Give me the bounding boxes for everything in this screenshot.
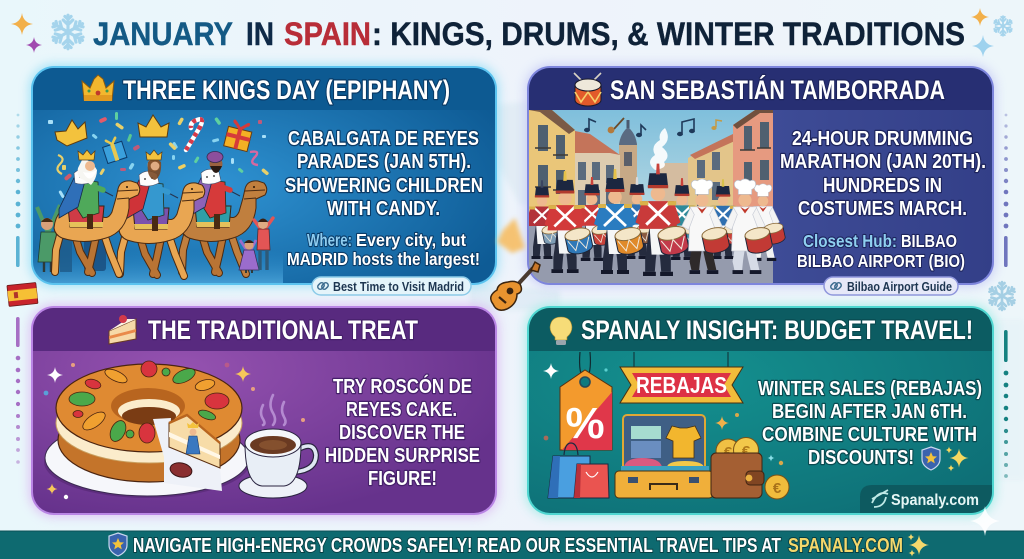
branding: spanaly.com badge: Spanaly.com xyxy=(891,492,979,509)
building left yellow xyxy=(529,110,575,212)
illustration: wallet and euro coins: € xyxy=(773,480,782,497)
footer text: SPANALY.COM xyxy=(788,535,903,557)
crown centre xyxy=(138,115,169,137)
text block: cabalgata description: CABALGATA DE REYES xyxy=(288,128,479,150)
text block: where: MADRID hosts the largest! xyxy=(287,249,480,269)
icon: shield and sparkle xyxy=(922,446,968,472)
candied fruit xyxy=(69,361,229,444)
icon: guitar xyxy=(491,262,540,310)
smoke xyxy=(650,128,668,170)
panel: three kings day xyxy=(29,64,499,295)
illustration: discount tag xyxy=(560,352,612,450)
faint world map background xyxy=(470,100,1024,480)
illustration: wallet and euro coins: € xyxy=(742,443,751,460)
camel and king three xyxy=(181,152,267,274)
illustration: hot chocolate cup xyxy=(239,395,316,498)
text block: drumming description: 24-HOUR DRUMMING xyxy=(792,128,973,150)
link pill: bilbao airport guide xyxy=(824,277,958,295)
text block: cabalgata description: PARADES (JAN 5TH). xyxy=(297,151,471,173)
footer banner xyxy=(0,531,1024,559)
title: SPAIN xyxy=(284,16,371,52)
distant building xyxy=(660,163,688,206)
icon: spain map shape xyxy=(497,218,525,253)
tower xyxy=(619,120,637,204)
building right salmon xyxy=(733,110,773,208)
text block: roscon description xyxy=(325,374,480,490)
title: : KINGS, DRUMS, & WINTER TRADITIONS xyxy=(372,16,965,52)
decorative dots right top xyxy=(1004,114,1008,267)
link pill: bilbao airport guide: Bilbao Airport Guide xyxy=(847,280,952,294)
bean xyxy=(169,461,193,479)
gift yellow xyxy=(224,120,253,152)
gift blue xyxy=(101,136,127,164)
text block: drumming description: COSTUMES MARCH. xyxy=(798,198,967,220)
text block: drumming description: HUNDREDS IN xyxy=(823,175,942,197)
branding: spanaly.com badge xyxy=(860,485,992,513)
text block: closest hub xyxy=(797,231,965,271)
street xyxy=(529,225,773,283)
icon: footer shield xyxy=(109,533,127,556)
children right xyxy=(239,218,273,273)
music notes xyxy=(584,118,722,137)
icon: light bulb xyxy=(550,317,572,345)
panel: traditional treat xyxy=(29,304,499,517)
link pill: best time to visit madrid xyxy=(312,277,471,295)
text block: winter sales description xyxy=(758,378,982,469)
text block: winter sales description: DISCOUNTS! xyxy=(808,447,914,469)
icon: right snowflake xyxy=(988,282,1016,310)
icon: drum xyxy=(574,73,601,106)
text block: roscon description: FIGURE! xyxy=(368,468,437,490)
link pill: best time to visit madrid: Best Time to Visit Madrid xyxy=(333,280,464,294)
drummers back row xyxy=(526,177,786,261)
text block: closest hub: BILBAO AIRPORT (BIO) xyxy=(797,251,965,271)
icon: gold crown xyxy=(82,75,114,101)
illustration: drummers in plaza xyxy=(526,110,786,283)
text block: cabalgata description: WITH CANDY. xyxy=(327,198,440,220)
illustration: wallet and euro coins: € xyxy=(724,444,733,461)
decorative dots right bottom xyxy=(1004,330,1008,478)
illustration: rebajas banner: REBAJAS xyxy=(636,372,727,398)
sparkles around cake xyxy=(44,363,305,499)
icon: top right snowflake xyxy=(993,16,1013,36)
confetti xyxy=(48,112,269,198)
text block: roscon description: HIDDEN SURPRISE xyxy=(325,445,480,467)
panel: spanaly insight xyxy=(525,304,996,517)
sparkles around sale items xyxy=(543,363,783,465)
illustration: wallet and euro coins xyxy=(711,438,789,499)
footer text: NAVIGATE HIGH-ENERGY CROWDS SAFELY! READ OUR ESSENTIAL TRAVEL TIPS AT xyxy=(133,535,781,557)
text block: drumming description: MARATHON (JAN 20TH). xyxy=(780,151,986,173)
illustration: three kings on camels xyxy=(37,112,273,276)
text block: where: Every city, but xyxy=(356,230,466,250)
illustration: shopping bags xyxy=(548,443,609,498)
illustration: roscon de reyes cake xyxy=(44,361,250,498)
icon: title snowflake xyxy=(51,15,85,49)
heading: tamborrada: SAN SEBASTIÁN TAMBORRADA xyxy=(610,74,945,105)
icon: corner sparkle xyxy=(970,506,1000,536)
crowd left xyxy=(37,205,106,272)
panel: san sebastian tamborrada xyxy=(525,64,996,295)
icon: spanish flag xyxy=(7,282,38,306)
text block: closest hub: BILBAO xyxy=(901,231,957,251)
decorative dots left bottom xyxy=(16,317,20,464)
text block: closest hub: Closest Hub: xyxy=(803,231,897,251)
title: JANUARY xyxy=(93,16,233,52)
candy cane xyxy=(186,119,202,150)
text block: where xyxy=(287,230,480,269)
cut wedge xyxy=(153,418,222,491)
text block: cabalgata description: SHOWERING CHILDREN xyxy=(285,175,483,197)
text block: winter sales description: COMBINE CULTURE WITH xyxy=(762,424,977,446)
title xyxy=(93,16,965,52)
text block: winter sales description: BEGIN AFTER JAN 6TH. xyxy=(772,401,967,423)
crown left xyxy=(55,120,87,146)
camel and king two xyxy=(119,150,205,276)
heading: traditional treat: THE TRADITIONAL TREAT xyxy=(148,315,418,345)
title: IN xyxy=(246,16,274,52)
text block: roscon description: REYES CAKE. xyxy=(346,399,457,421)
building right back xyxy=(688,134,733,206)
illustration: open suitcase xyxy=(615,415,713,498)
illustration: discount tag: % xyxy=(565,399,605,448)
drummers front row xyxy=(545,164,773,276)
icon: cake slice xyxy=(109,315,136,344)
icon: top sparkles xyxy=(11,8,994,57)
illustration: rebajas banner xyxy=(620,352,743,403)
decorative dots left top xyxy=(16,114,20,267)
text block: roscon description: TRY ROSCÓN DE xyxy=(333,374,472,398)
text block: cabalgata description xyxy=(285,128,483,220)
text block: winter sales description: WINTER SALES (REBAJAS) xyxy=(758,378,982,400)
cut slice face xyxy=(169,415,220,468)
text block: roscon description: DISCOVER THE xyxy=(339,422,465,444)
text block: drumming description xyxy=(780,128,986,220)
text block: where: Where: xyxy=(307,230,352,250)
building left back xyxy=(575,131,620,205)
icon: footer sparkle xyxy=(908,534,929,556)
camel and king one xyxy=(54,150,140,274)
heading: three kings day: THREE KINGS DAY (EPIPHANY) xyxy=(123,75,450,105)
